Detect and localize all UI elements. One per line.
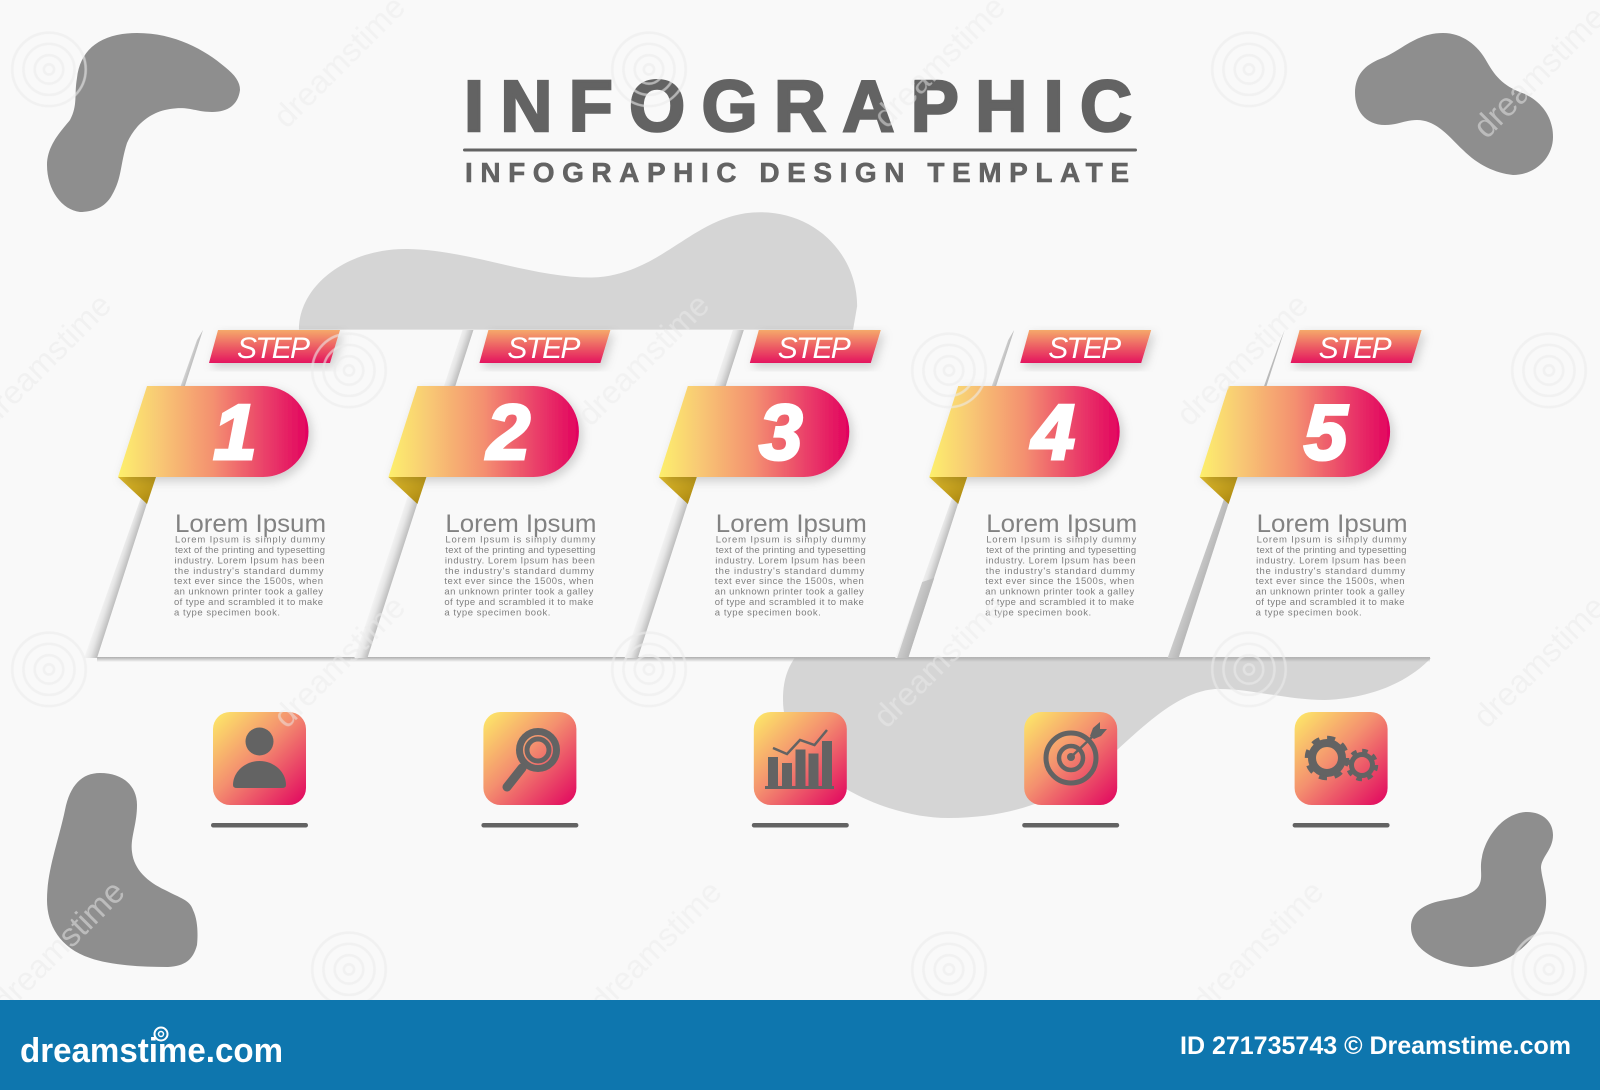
- step 3 text: the industry's standard dummy: [715, 566, 865, 577]
- icon: target: [1022, 712, 1119, 828]
- step 3 text: a type specimen book.: [715, 607, 821, 618]
- step 2 text: the industry's standard dummy: [445, 566, 594, 577]
- step 3 text: [715, 510, 867, 618]
- step 1 text: an unknown printer took a galley: [174, 587, 323, 598]
- step 5 text: text of the printing and typesetting: [1257, 545, 1407, 556]
- step 5 text: the industry's standard dummy: [1256, 566, 1405, 577]
- title rule: [463, 148, 1137, 152]
- step 2 text: industry. Lorem Ipsum has been: [445, 556, 595, 566]
- step 3 text: of type and scrambled it to make: [715, 597, 864, 608]
- icon: magnifier: [481, 712, 578, 828]
- step 2 text: [444, 510, 596, 618]
- step 2: [388, 330, 610, 618]
- shadow: card 3: [625, 330, 744, 658]
- step 5 text: [1256, 510, 1408, 618]
- step 1 tag: STEP: [237, 332, 310, 365]
- step 5 text: industry. Lorem Ipsum has been: [1256, 556, 1406, 566]
- step 1 text: text of the printing and typesetting: [175, 545, 325, 556]
- step 4 ribbon: [929, 386, 1120, 504]
- step 3 text: Lorem Ipsum is simply dummy: [716, 534, 866, 546]
- step 3 text: text ever since the 1500s, when: [715, 576, 864, 587]
- step 1 text: Lorem Ipsum is simply dummy: [175, 534, 325, 546]
- shadow: card 4 lower: [897, 578, 934, 658]
- step 4 text: an unknown printer took a galley: [985, 587, 1134, 598]
- watermark: dreamstime: [1184, 873, 1331, 1019]
- step 5: [1200, 330, 1422, 618]
- blob: top left: [47, 33, 240, 212]
- footer logo: dreamstime.com: [20, 1032, 283, 1070]
- icon: bar chart: [752, 712, 849, 828]
- step 5 text: an unknown printer took a galley: [1256, 587, 1405, 598]
- step 2 tag: [479, 330, 610, 365]
- step 4: [929, 330, 1151, 618]
- step 3 text: Lorem Ipsum: [716, 510, 867, 538]
- shadow: card 4: [895, 330, 1014, 658]
- step 4 text: industry. Lorem Ipsum has been: [986, 556, 1136, 566]
- step 1 tag: [209, 330, 340, 365]
- step 2 text: Lorem Ipsum: [445, 510, 596, 538]
- footer credit: ID 271735743 © Dreamstime.com: [1180, 1032, 1571, 1060]
- step 4 ribbon: 4: [1030, 388, 1075, 476]
- watermark: dreamstime: [570, 286, 716, 433]
- step 5 text: Lorem Ipsum is simply dummy: [1257, 534, 1407, 546]
- step 1 text: industry. Lorem Ipsum has been: [174, 556, 324, 566]
- step 1 text: text ever since the 1500s, when: [174, 576, 323, 587]
- step 5 text: Lorem Ipsum: [1257, 510, 1408, 538]
- card bottom edge shadow: [97, 657, 1430, 662]
- step 3 text: text of the printing and typesetting: [716, 545, 866, 556]
- step 3 tag: STEP: [778, 332, 851, 365]
- step 4 text: Lorem Ipsum: [986, 510, 1137, 538]
- step 2 text: Lorem Ipsum is simply dummy: [445, 534, 596, 546]
- icon: person: [211, 712, 308, 828]
- step 3: [659, 330, 881, 618]
- step 2 ribbon: [388, 386, 579, 504]
- subtitle: INFOGRAPHIC DESIGN TEMPLATE: [465, 157, 1129, 188]
- title block: [463, 67, 1137, 188]
- shadow: card 5: [1168, 330, 1285, 658]
- step 4 text: Lorem Ipsum is simply dummy: [986, 534, 1136, 546]
- step 5 tag: [1291, 330, 1422, 365]
- step 1 ribbon: 1: [213, 388, 257, 476]
- step 3 ribbon: [659, 386, 849, 504]
- blob: bottom left: [47, 773, 198, 967]
- step 3 tag: [750, 330, 881, 365]
- step 1 ribbon: [118, 386, 308, 504]
- step 4 tag: [1020, 330, 1151, 365]
- step 2 text: text ever since the 1500s, when: [444, 576, 593, 587]
- blob: top right: [1355, 33, 1553, 175]
- step 1 text: of type and scrambled it to make: [174, 597, 323, 608]
- step 4 text: the industry's standard dummy: [986, 566, 1135, 577]
- step 2 text: of type and scrambled it to make: [444, 597, 593, 608]
- blob: light upper: [299, 212, 857, 330]
- step 5 tag: STEP: [1319, 332, 1392, 365]
- step 1 text: Lorem Ipsum: [175, 510, 326, 538]
- step 2 text: text of the printing and typesetting: [445, 545, 595, 556]
- step 5 text: a type specimen book.: [1256, 607, 1362, 618]
- watermark: dreamstime: [582, 873, 728, 1019]
- step 1: [118, 330, 340, 618]
- watermark: dreamstime: [1168, 286, 1315, 433]
- step 1 text: [174, 510, 326, 618]
- step 2 ribbon: 2: [485, 388, 530, 476]
- blob: light lower: [783, 580, 1431, 818]
- shadow: card 2: [354, 330, 473, 658]
- step 1 text: a type specimen book.: [174, 607, 280, 618]
- step 4 text: [985, 510, 1137, 618]
- icon: gears: [1293, 712, 1390, 828]
- step 2 tag: STEP: [507, 332, 580, 365]
- step 4 text: a type specimen book.: [985, 607, 1091, 618]
- step 1 text: the industry's standard dummy: [174, 566, 324, 577]
- step 5 ribbon: 5: [1304, 388, 1349, 476]
- step 3 text: an unknown printer took a galley: [715, 587, 864, 598]
- step 5 text: of type and scrambled it to make: [1256, 597, 1405, 608]
- footer banner: [0, 1000, 1600, 1090]
- step 4 text: of type and scrambled it to make: [985, 597, 1134, 608]
- watermark: dreamstime: [265, 588, 412, 735]
- step 3 text: industry. Lorem Ipsum has been: [715, 556, 865, 566]
- step 2 text: a type specimen book.: [444, 607, 550, 618]
- step 3 ribbon: 3: [759, 388, 802, 476]
- card fold shadows: [84, 330, 1285, 658]
- title: INFOGRAPHIC: [464, 67, 1132, 147]
- step 5 text: text ever since the 1500s, when: [1256, 576, 1405, 587]
- blob: bottom right: [1411, 812, 1553, 967]
- shadow: card 1: [84, 330, 203, 658]
- step 5 ribbon: [1200, 386, 1390, 504]
- watermark: dreamstime: [865, 588, 1012, 735]
- step 4 tag: STEP: [1048, 332, 1121, 365]
- step 4 text: text of the printing and typesetting: [986, 545, 1136, 556]
- step 4 text: text ever since the 1500s, when: [985, 576, 1134, 587]
- step 2 text: an unknown printer took a galley: [444, 587, 594, 598]
- card sheet: [97, 330, 1440, 658]
